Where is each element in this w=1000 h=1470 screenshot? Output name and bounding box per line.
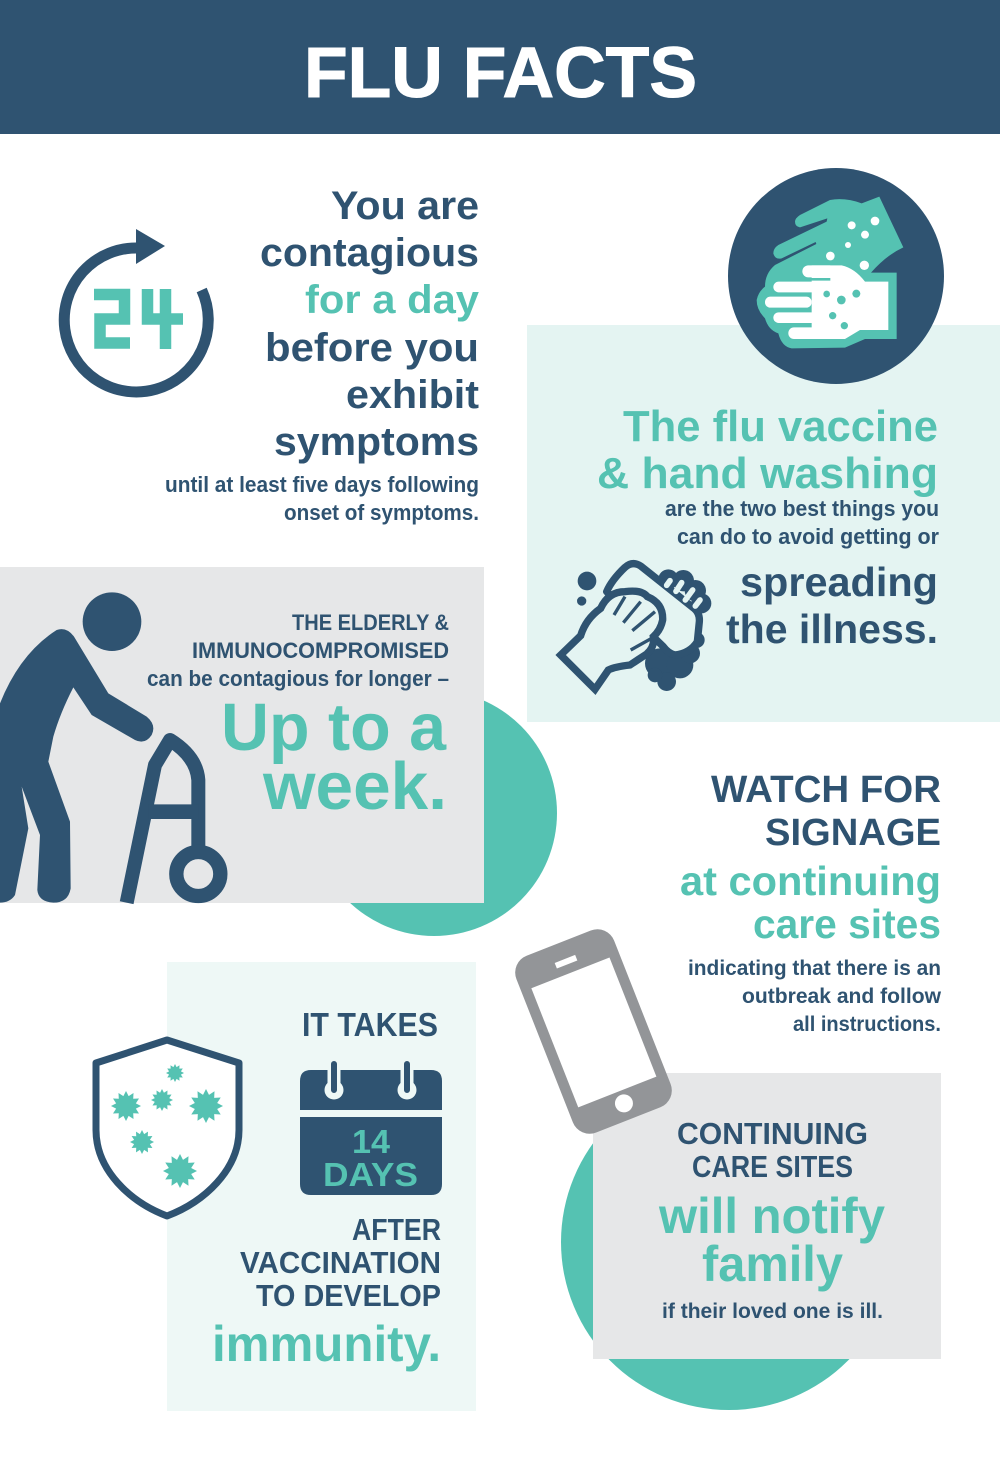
heading: you are contagious: for a day xyxy=(305,278,480,322)
text: after vaccination to develop: VACCINATION xyxy=(240,1245,441,1280)
heading: watch for signage: SIGNAGE xyxy=(765,812,941,854)
panel: continuing care sites notify family xyxy=(510,924,941,1410)
text: if their loved one is ill: if their loved one is ill. xyxy=(662,1300,883,1323)
heading: continuing care sites: CARE SITES xyxy=(692,1149,853,1184)
text: after vaccination to develop xyxy=(240,1212,441,1313)
heading: spreading the illness: spreading xyxy=(740,559,938,605)
text: until five days: until at least five days following xyxy=(165,472,479,497)
heading: you are contagious: You are xyxy=(331,184,479,228)
text: outbreak instructions: outbreak and follow xyxy=(742,985,942,1008)
heading: you are contagious: symptoms xyxy=(274,420,479,464)
heading: watch for signage: WATCH FOR xyxy=(711,769,941,811)
header banner xyxy=(0,0,1000,134)
heading: at continuing care sites: at continuing xyxy=(680,858,941,904)
text: the elderly: IMMUNOCOMPROMISED xyxy=(192,638,449,663)
heading: will notify family: family xyxy=(702,1236,843,1292)
text: two best things: can do to avoid getting or xyxy=(677,524,939,549)
panel: elderly and immunocompromised xyxy=(0,567,557,936)
heading: immunity: immunity. xyxy=(212,1316,441,1372)
heading: you are contagious xyxy=(260,184,480,464)
text: two best things: are the two best things you xyxy=(665,496,939,521)
heading: will notify family: will notify xyxy=(658,1188,885,1244)
text: until five days: onset of symptoms. xyxy=(284,500,479,525)
icon: calendar 14 days xyxy=(300,1064,442,1195)
text: two best things xyxy=(665,496,939,549)
text: the elderly xyxy=(147,610,449,691)
icon: calendar 14 days: DAYS xyxy=(323,1156,418,1193)
heading: continuing care sites xyxy=(677,1116,868,1184)
icon: 24 hour circular arrow xyxy=(64,229,208,392)
text: after vaccination to develop: TO DEVELOP xyxy=(256,1278,441,1313)
icon: hands with germs in circle xyxy=(728,168,944,384)
icon: elderly person with walker xyxy=(0,592,220,903)
heading: up to a week: Up to a xyxy=(221,690,447,765)
heading: the flu vaccine: & hand washing xyxy=(597,449,938,498)
text: outbreak instructions: indicating that there is an xyxy=(688,957,941,980)
heading: at continuing care sites: care sites xyxy=(753,901,941,947)
heading: spreading the illness xyxy=(726,559,938,652)
text: outbreak instructions: all instructions. xyxy=(793,1013,941,1036)
heading: at continuing care sites xyxy=(680,858,941,947)
text: the elderly: can be contagious for longer – xyxy=(147,666,449,691)
heading: up to a week xyxy=(221,690,447,824)
text: outbreak instructions xyxy=(688,957,942,1036)
panel: vaccine and hand washing xyxy=(527,168,1000,722)
text: after vaccination to develop: AFTER xyxy=(352,1212,441,1247)
heading: the flu vaccine: The flu vaccine xyxy=(623,402,938,451)
heading: spreading the illness: the illness. xyxy=(726,606,938,652)
text: until five days xyxy=(165,472,479,525)
heading: continuing care sites: CONTINUING xyxy=(677,1116,868,1151)
panel: watch for signage xyxy=(680,769,942,1036)
heading: will notify family xyxy=(658,1188,885,1292)
panel: contagious for a day xyxy=(64,184,480,525)
heading: you are contagious: before you xyxy=(265,326,479,370)
heading: watch for signage xyxy=(711,769,941,854)
heading: up to a week: week. xyxy=(262,749,447,824)
icon: smartphone xyxy=(510,924,677,1139)
panel: 14 days to immunity xyxy=(96,962,476,1411)
heading: you are contagious: exhibit xyxy=(346,373,479,417)
text: it takes: IT TAKES xyxy=(302,1006,438,1043)
icon: hands washing with soap xyxy=(561,564,711,691)
heading: the flu vaccine xyxy=(597,402,938,498)
icon: calendar 14 days: 14 xyxy=(352,1123,391,1160)
title: FLU FACTS xyxy=(304,34,697,113)
icon: shield with viruses xyxy=(96,1040,239,1216)
heading: you are contagious: contagious xyxy=(260,231,479,275)
text: the elderly: THE ELDERLY & xyxy=(292,610,449,635)
